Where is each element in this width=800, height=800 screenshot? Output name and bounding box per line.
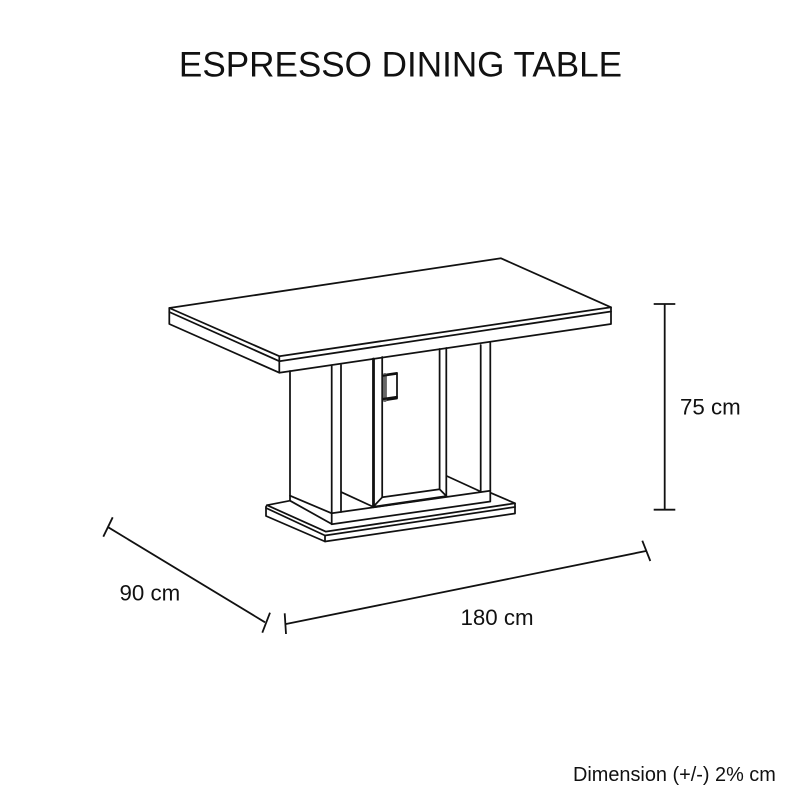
title: ESPRESSO DINING TABLE xyxy=(179,46,622,85)
tolerance note: Dimension (+/-) 2% cm xyxy=(573,764,776,786)
door panel xyxy=(374,348,446,507)
dimension: width xyxy=(285,541,650,634)
pedestal xyxy=(290,343,490,524)
label: 75 cm: 75 cm xyxy=(680,394,741,419)
base plinth xyxy=(266,493,515,542)
label: 180 cm: 180 cm xyxy=(460,605,534,630)
dimension: depth xyxy=(103,517,270,633)
label: 90 cm: 90 cm xyxy=(120,581,180,606)
dimension: height xyxy=(654,304,741,510)
table illustration xyxy=(169,258,611,542)
door handle xyxy=(383,373,397,401)
table top xyxy=(169,258,611,373)
